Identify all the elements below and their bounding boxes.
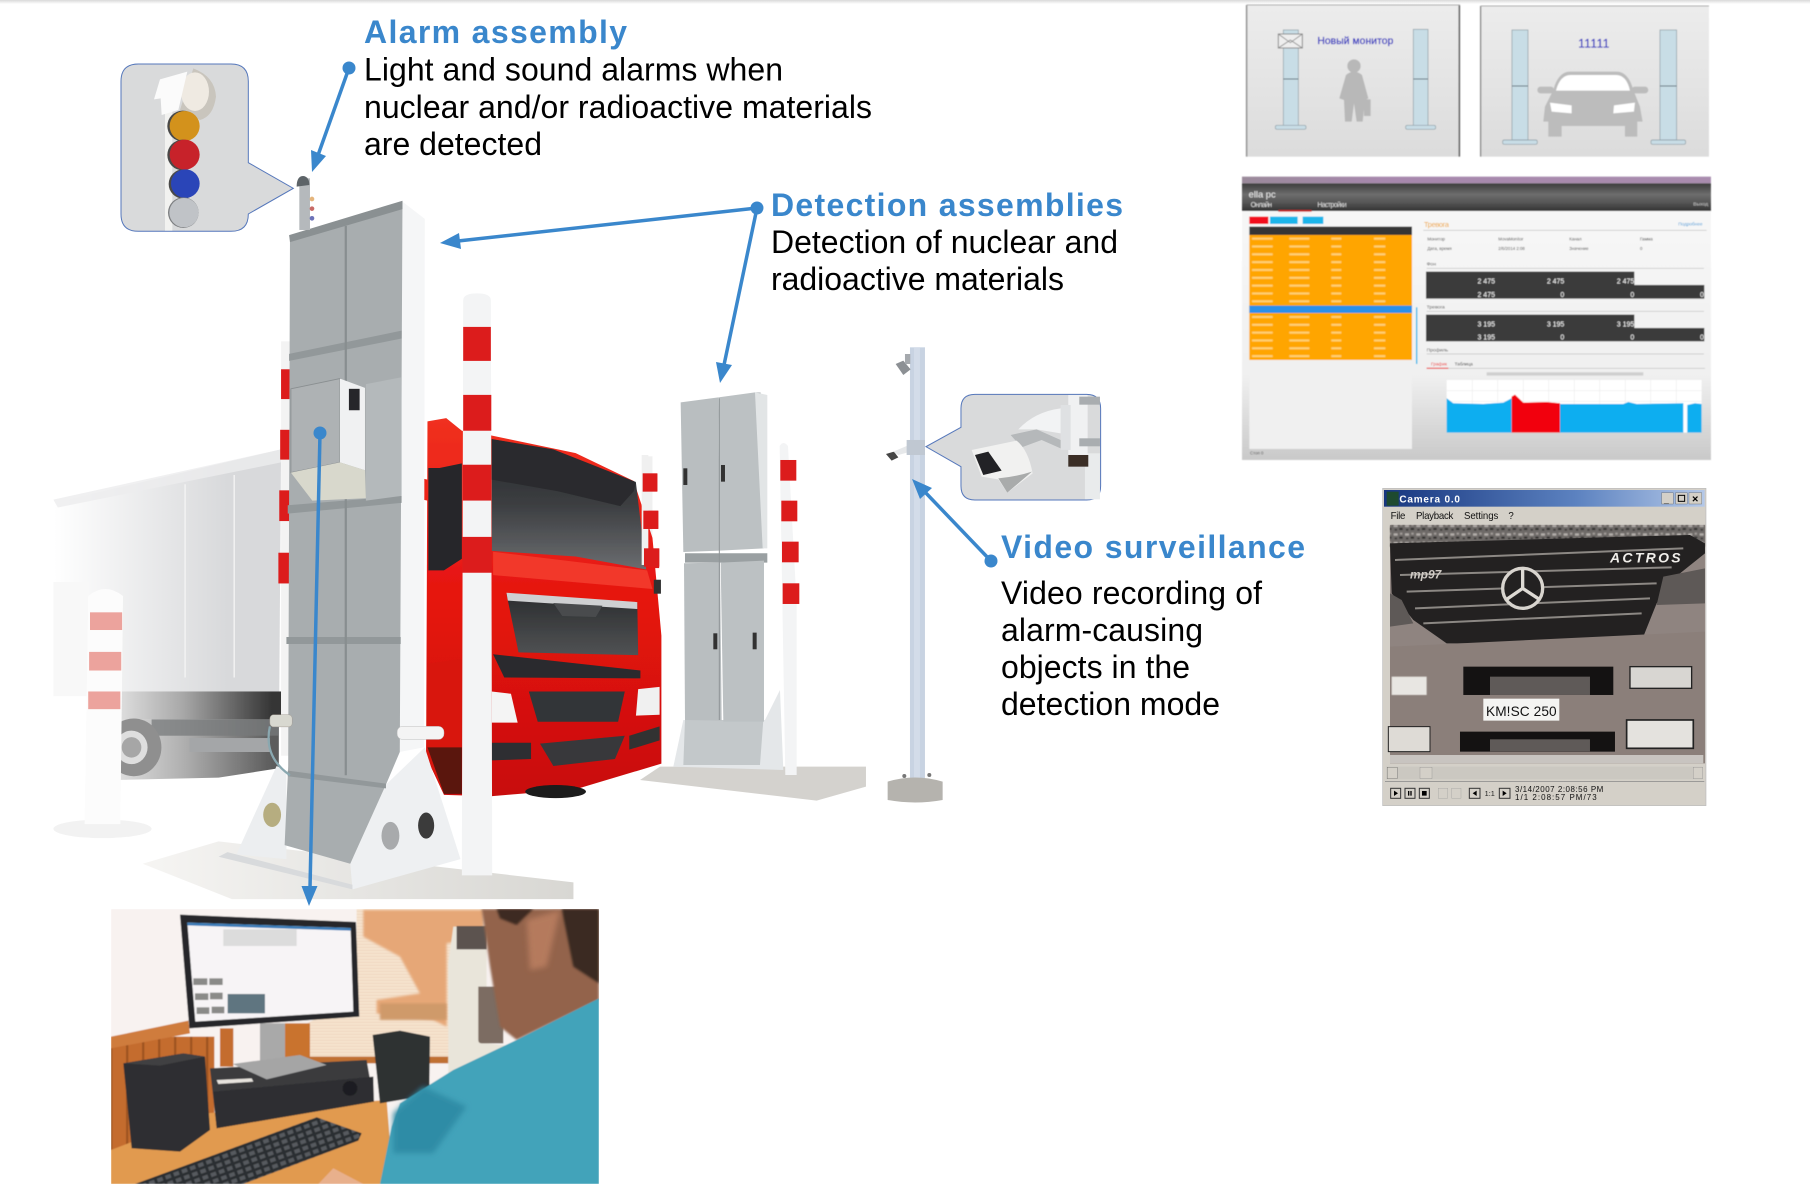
red truck cab [416,418,661,798]
screenshot: monitoring software: 2/6/2014 2:08 [1498,246,1525,251]
text: alarm assembly [364,14,872,162]
screenshot: camera window [1383,488,1706,806]
truck photo: mp97 [1410,567,1443,581]
screenshot: monitoring software: Тревога [1427,304,1445,310]
screenshot: monitoring software: MovaMonitor [1498,236,1524,241]
desk amplifier [210,1060,374,1128]
operator head [482,909,599,1040]
right pole behind truck [643,456,659,573]
screenshot: camera window: 3/14/2007 2:08:56 PM [1515,785,1603,794]
arrow: detection assemblies to portal [440,202,764,249]
speakers [123,1053,210,1152]
screenshot: monitoring software: 3 195 [1477,335,1495,342]
left faded bollard [53,582,152,838]
screenshot: monitoring software: 3 195 [1477,321,1495,328]
truck photo: KM!SC 250 [1486,704,1557,719]
truck, portal monitor and bollards scene [53,201,661,899]
screenshot: monitoring software [1242,177,1711,460]
screenshot: camera window: 1/1 2:08:57 PM/73 [1515,793,1597,802]
screenshot: camera window: Settings [1464,511,1498,522]
arrow: detection assemblies to cabinet [716,208,757,383]
icon: siren stack [154,68,216,231]
back pole left of portal [278,341,291,756]
text: video surveillance: objects in the [1001,649,1190,685]
text: detection assemblies: Detection assemblies [771,187,1123,223]
truck photo: ACTROS [1609,550,1681,566]
text: video surveillance [1001,529,1305,722]
callout: alarm assembly close-up [121,64,293,231]
screenshot: camera window: _ [1663,495,1669,505]
keyboard [135,1117,362,1184]
right cabinet detection assembly, slab, and camera pole [640,347,943,802]
camera pole [886,347,943,802]
icon: car [1537,72,1648,137]
text: detection assemblies [771,187,1123,297]
screenshot: pedestrian monitor [1247,5,1460,157]
screenshot: monitoring software: Монитор [1427,236,1446,241]
screenshot: monitoring software: Таблица [1455,361,1473,366]
text: video surveillance: alarm-causing [1001,612,1203,648]
screenshot: monitoring software: Дата, время [1427,246,1452,251]
detection cabinets [673,392,783,770]
screenshot: monitoring software: 0 [1630,335,1634,342]
screenshot: vehicle monitor: 11111 [1578,38,1609,51]
screenshot: monitoring software: Значение [1569,246,1589,251]
screenshot: monitoring software: 0 [1560,292,1564,299]
screenshot: monitoring software: Тревога [1424,220,1450,229]
text: video surveillance: Video recording of [1001,575,1262,611]
screenshot: camera window: ✕ [1692,494,1699,504]
screenshot: monitoring software: Онлайн [1251,201,1272,209]
screenshot: monitoring software: 0 [1640,246,1643,251]
faded trailer [53,449,281,780]
screenshot: camera window: Playback [1416,511,1453,522]
portal base frame [219,747,461,889]
screenshot: monitoring software: 2 475 [1547,279,1564,286]
truck photo [1388,525,1705,763]
screenshot: camera window: Camera 0.0 [1399,494,1460,505]
icon: dome camera [972,395,1100,499]
operator shirt [380,998,599,1184]
screenshot: camera window: 1:1 [1485,789,1495,798]
screenshot: monitoring software: 0 [1700,292,1704,299]
electronics cabinet box [291,379,366,501]
screenshot: monitoring software: 2 475 [1617,279,1634,286]
screenshot: monitoring software: График [1431,361,1448,366]
screenshot: monitoring software: Канал [1569,236,1582,241]
text: detection assemblies: Detection of nuclear and [771,224,1118,260]
screenshot: monitoring software: Гамма [1640,236,1653,241]
screenshot: monitoring software: 3 195 [1547,321,1564,328]
text: alarm assembly: Light and sound alarms when [364,52,783,88]
monitor [260,1023,285,1063]
screenshot: camera window: ? [1508,511,1514,522]
slab under main portal [143,841,573,899]
concrete slab right [640,767,866,801]
screenshot: monitoring software: Настройки [1317,201,1347,209]
callout: camera close-up [926,394,1101,500]
screenshot: monitoring software: 0 [1630,292,1634,299]
text: detection assemblies: radioactive materials [771,261,1064,297]
text: video surveillance: Video surveillance [1001,529,1305,565]
screenshot: pedestrian monitor: Новый монитор [1317,36,1394,47]
text: alarm assembly: are detected [364,126,542,162]
screenshot: vehicle monitor [1481,6,1709,157]
screenshot: camera window: File [1391,511,1405,522]
screenshot: monitoring software: 2 475 [1477,279,1495,286]
screenshot: monitoring software: Подробнее [1678,221,1703,226]
alarm beacon on top of portal [297,176,314,230]
arrow: alarm assembly [311,62,356,172]
red and white poles beside cabinet [642,443,799,775]
screenshot: monitoring software: Профиль [1427,347,1449,353]
photo: operator at workstation [111,909,599,1184]
screenshot: monitoring software: ella pc [1249,189,1276,199]
screenshot: monitoring software: Фон [1427,262,1436,268]
screenshot: monitoring software: Выход [1693,201,1708,207]
front red and white pole [462,293,492,875]
screenshot: monitoring software: 2 475 [1477,292,1495,299]
large detection panel [269,201,444,864]
screenshot: monitoring software: 0 [1700,335,1704,342]
screenshot: monitoring software: Стоп 0 [1250,451,1264,456]
text: alarm assembly: Alarm assembly [364,14,627,50]
text: video surveillance: detection mode [1001,686,1220,722]
arrow: box to control workstation [302,426,326,906]
screenshot: monitoring software: 3 195 [1617,321,1634,328]
printer [448,927,517,1073]
text: alarm assembly: nuclear and/or radioactive materials [364,89,872,125]
screenshot: monitoring software: 0 [1560,335,1564,342]
arrow: video surveillance [912,479,998,568]
